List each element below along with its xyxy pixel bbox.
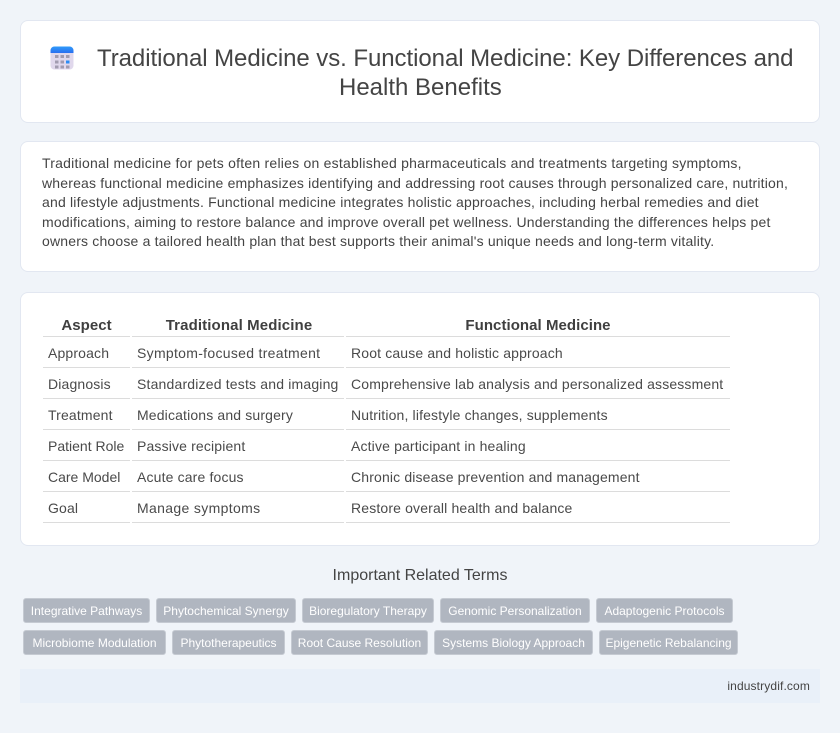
related terms tags: Systems Biology Approach: [442, 636, 585, 650]
related terms tags: Phytochemical Synergy: [163, 604, 289, 618]
icon: calendar: [50, 46, 74, 70]
comparison table: Medications and surgery: [137, 407, 293, 423]
intro panel: [20, 141, 820, 272]
related terms tags: Root Cause Resolution: [298, 636, 421, 650]
related terms tags: Microbiome Modulation: [32, 636, 157, 650]
comparison table: Treatment: [48, 407, 113, 423]
comparison table: Standardized tests and imaging: [137, 376, 339, 392]
comparison table: Care Model: [48, 469, 120, 485]
comparison table: Nutrition, lifestyle changes, supplements: [351, 407, 608, 423]
intro text: and lifestyle adjustments. Functional medicine integrates holistic approaches, including herbal remedies and diet: [42, 194, 759, 210]
comparison table: Root cause and holistic approach: [351, 345, 563, 361]
related terms heading: Important Related Terms: [333, 567, 507, 584]
table panel: [20, 292, 820, 546]
related terms tags: Bioregulatory Therapy: [309, 604, 427, 618]
related terms tags: Epigenetic Rebalancing: [605, 636, 732, 650]
title: Health Benefits: [339, 74, 502, 101]
intro text: whereas functional medicine emphasizes identifying and addressing root causes through personalized care, nutrition,: [42, 175, 788, 191]
intro text: [42, 155, 788, 249]
comparison table: Restore overall health and balance: [351, 500, 572, 516]
related terms tags: Phytotherapeutics: [180, 636, 277, 650]
comparison table: Traditional Medicine: [166, 317, 312, 334]
related terms tags: Integrative Pathways: [31, 604, 142, 618]
comparison table: Goal: [48, 500, 78, 516]
comparison table: Approach: [48, 345, 109, 361]
comparison table: Passive recipient: [137, 438, 245, 454]
related terms tags: Genomic Personalization: [448, 604, 582, 618]
comparison table: Patient Role: [48, 438, 124, 454]
footer source: industrydif.com: [727, 679, 810, 693]
footer bar: [20, 669, 820, 703]
comparison table: Active participant in healing: [351, 438, 526, 454]
intro text: modifications, aiming to restore balance and improve overall pet wellness. Understanding the differences helps pet: [42, 214, 771, 230]
comparison table: Acute care focus: [137, 469, 244, 485]
comparison table: Comprehensive lab analysis and personalized assessment: [351, 376, 723, 392]
comparison table: Manage symptoms: [137, 500, 261, 516]
intro text: owners choose a tailored health plan that best supports their animal's unique needs and long-term vitality.: [42, 233, 714, 249]
comparison table: Functional Medicine: [465, 317, 611, 334]
header panel: [20, 20, 820, 123]
intro text: Traditional medicine for pets often relies on established pharmaceuticals and treatments targeting symptoms,: [42, 155, 742, 171]
title: [97, 45, 793, 101]
comparison table: Aspect: [61, 317, 112, 334]
comparison table: Chronic disease prevention and management: [351, 469, 640, 485]
comparison table: Diagnosis: [48, 376, 111, 392]
title: Traditional Medicine vs. Functional Medicine: Key Differences and: [97, 45, 793, 72]
related terms tags: Adaptogenic Protocols: [604, 604, 725, 618]
comparison table: Symptom-focused treatment: [137, 345, 320, 361]
